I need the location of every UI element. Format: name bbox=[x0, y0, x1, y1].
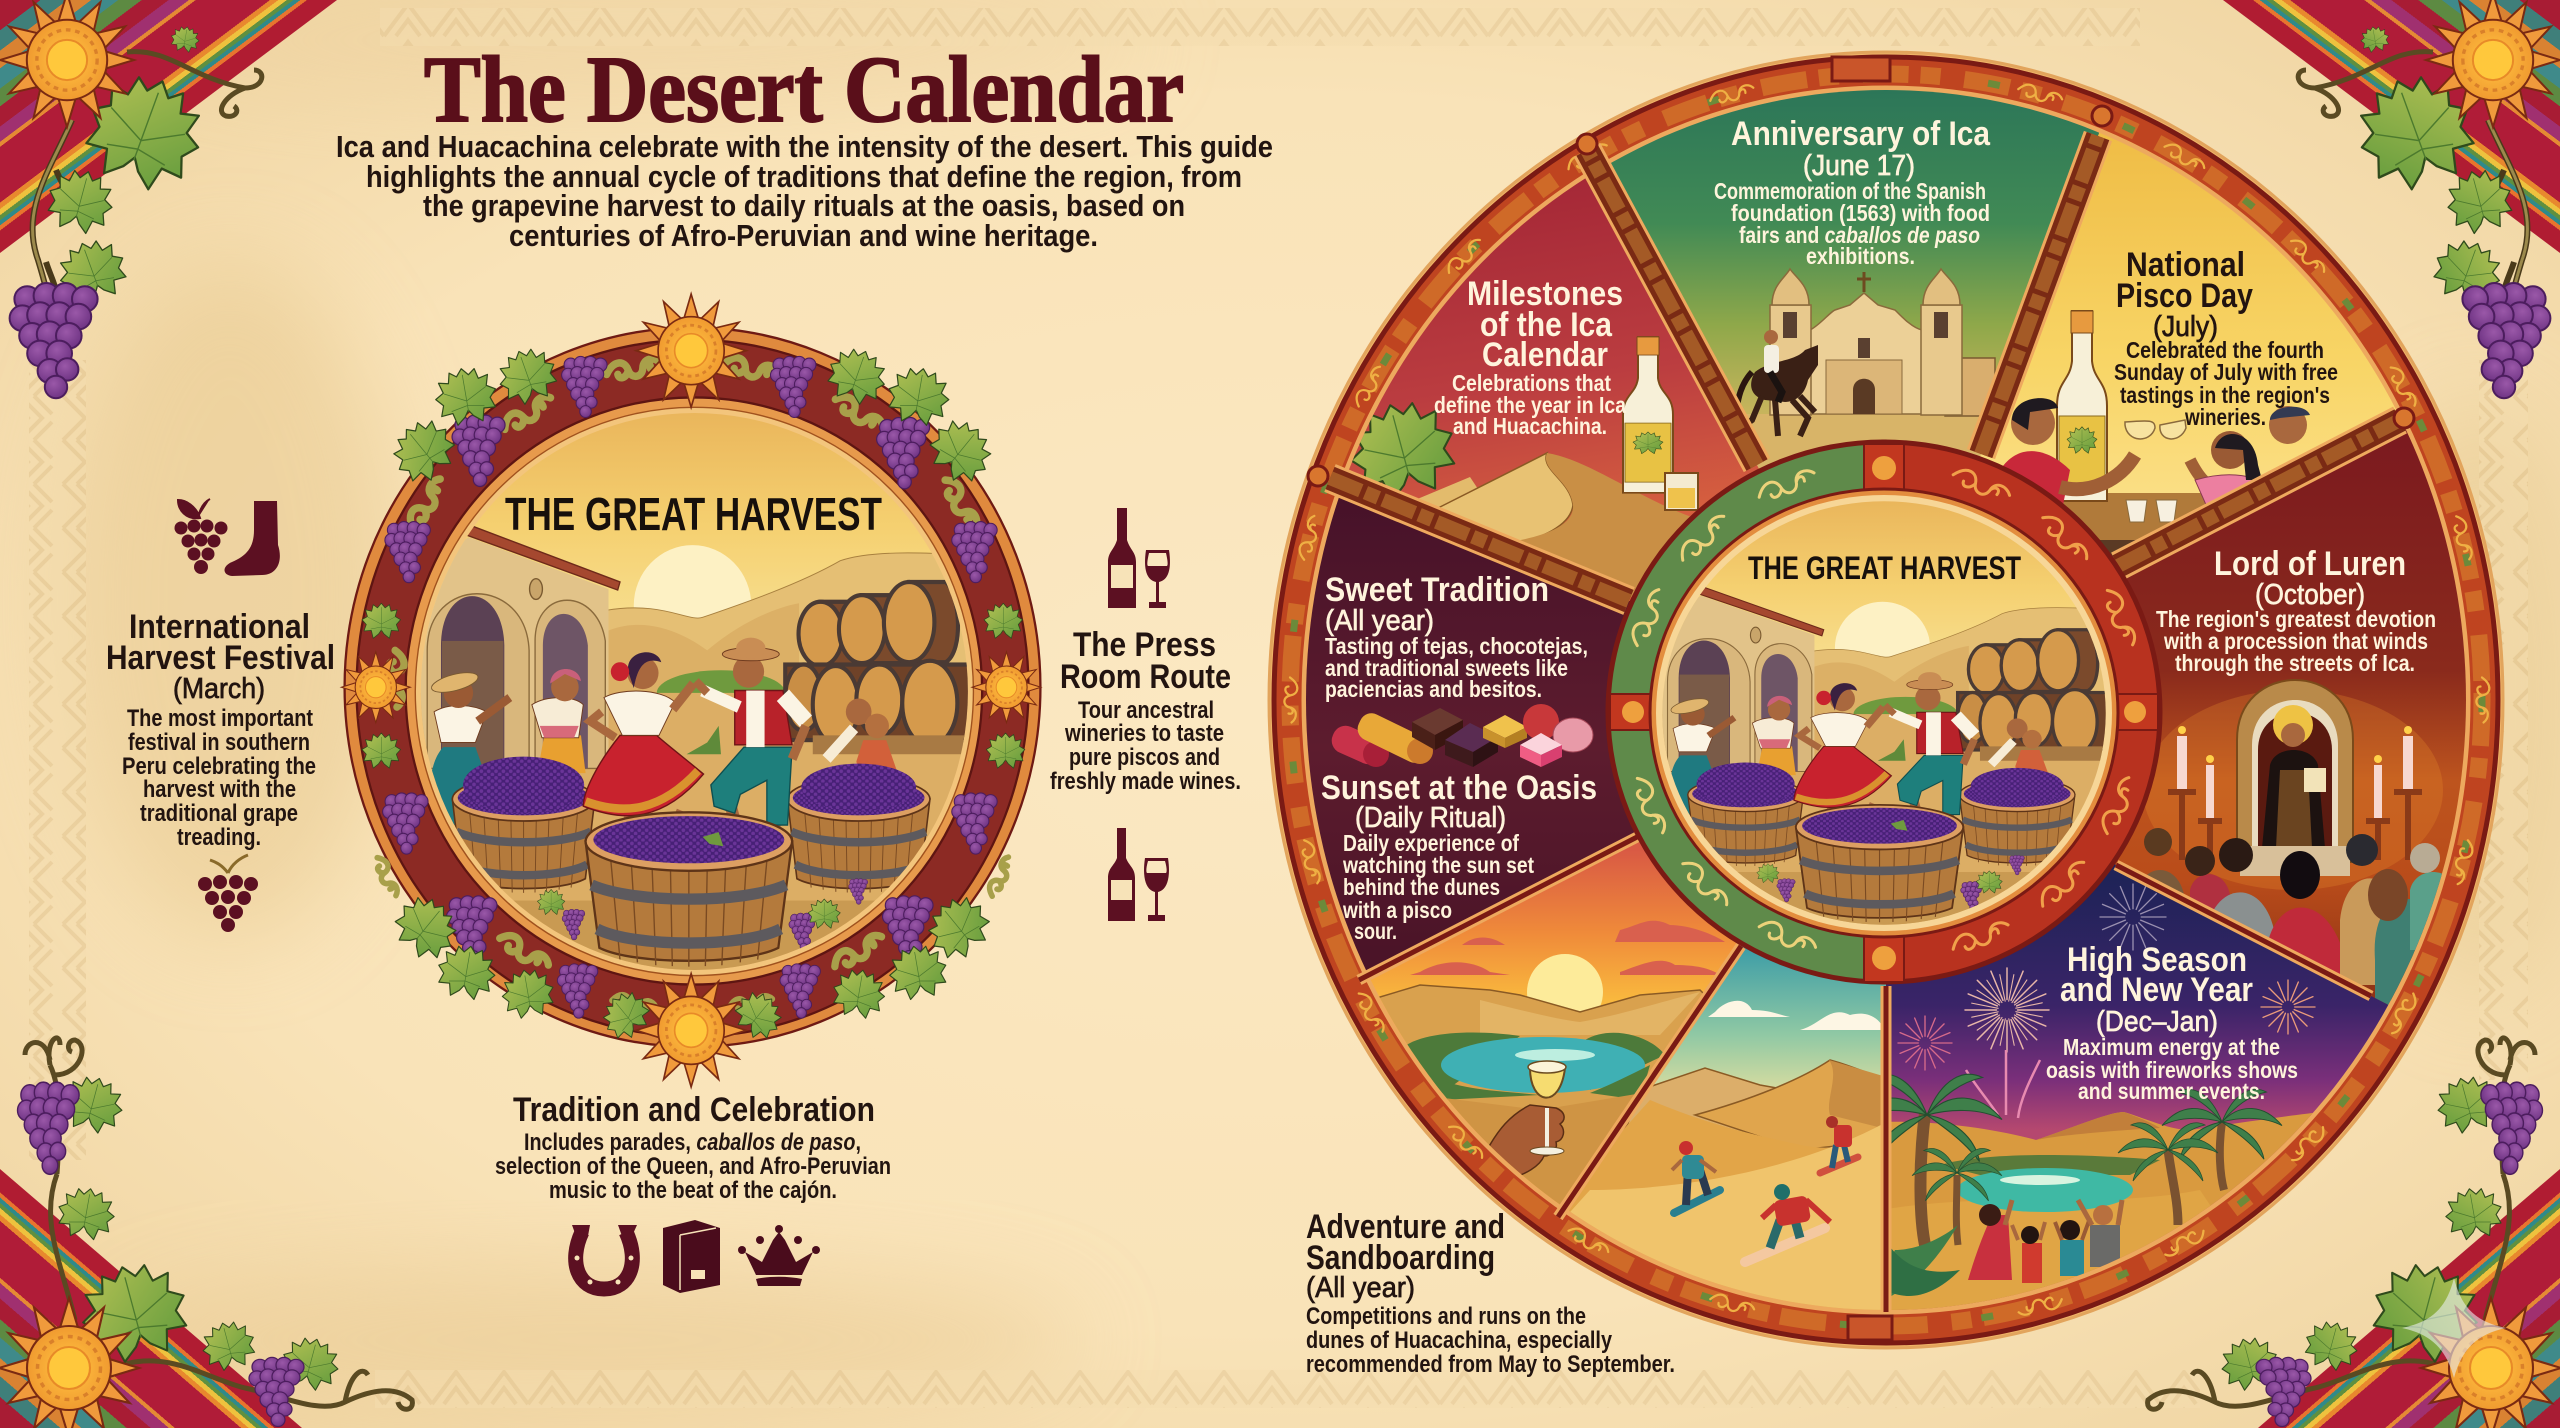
high season text: (Dec–Jan) bbox=[2096, 1006, 2218, 1038]
label: press room route: pure piscos and bbox=[1069, 744, 1220, 771]
intro paragraph: Ica and Huacachina celebrate with the intensity of the desert. This guide bbox=[336, 129, 1273, 164]
milestones text: Calendar bbox=[1482, 336, 1608, 374]
ring leaves and grapes bbox=[362, 341, 1025, 1046]
high season text: High Season bbox=[2067, 941, 2247, 979]
sunset at the oasis text: Daily experience of bbox=[1343, 830, 1519, 856]
icon: grapes and foot bbox=[174, 499, 280, 576]
label: international harvest festival: Peru celebrating the bbox=[122, 753, 316, 780]
anniversary text bbox=[1714, 115, 1991, 269]
wedge: sweet tradition bbox=[1270, 440, 1690, 1000]
panel: calendar wheel bbox=[1269, 50, 2520, 1400]
label: press room route: wineries to taste bbox=[1064, 720, 1224, 747]
label: press room route bbox=[1050, 626, 1241, 795]
corner: bottom-right bbox=[2148, 1038, 2560, 1428]
label: tradition and celebration: music to the beat of the cajón. bbox=[549, 1177, 837, 1204]
sweet tradition text: paciencias and besitos. bbox=[1325, 676, 1542, 702]
medallion heading: THE GREAT HARVEST bbox=[505, 488, 882, 540]
label: international harvest festival: traditional grape bbox=[140, 800, 298, 827]
corner: top-left bbox=[0, 0, 337, 398]
label: press room route: Room Route bbox=[1060, 658, 1231, 696]
sweet tradition text bbox=[1325, 571, 1588, 702]
roundel scene bbox=[1653, 495, 2118, 933]
intro paragraph: centuries of Afro-Peruvian and wine heritage. bbox=[509, 218, 1098, 253]
scene: pisco toast bbox=[2000, 311, 2325, 570]
sunset at the oasis text: watching the sun set bbox=[1342, 852, 1534, 878]
scene: sweets bbox=[1328, 704, 1593, 768]
scene: dune, leaf, bottle bbox=[1340, 337, 1700, 600]
pisco text: tastings in the region's bbox=[2120, 382, 2330, 408]
wheel spokes bbox=[1330, 136, 2400, 1312]
label: press room route: The Press bbox=[1073, 626, 1216, 664]
sweet tradition text: and traditional sweets like bbox=[1325, 655, 1568, 681]
label: press room route: Tour ancestral bbox=[1078, 697, 1214, 724]
sunset at the oasis text: with a pisco bbox=[1342, 897, 1452, 923]
ring rosettes and tiles bbox=[1308, 57, 2414, 1340]
label: adventure and sandboarding: recommended from May to September. bbox=[1306, 1351, 1675, 1378]
anniversary text: exhibitions. bbox=[1806, 243, 1915, 269]
anniversary text: (June 17) bbox=[1803, 150, 1915, 182]
sunset at the oasis text: Sunset at the Oasis bbox=[1321, 769, 1597, 807]
milestones text: and Huacachina. bbox=[1453, 413, 1607, 439]
label: international harvest festival: treading. bbox=[177, 824, 261, 851]
label: tradition and celebration bbox=[495, 1091, 891, 1204]
milestones text: of the Ica bbox=[1480, 306, 1613, 344]
sweet tradition text: Tasting of tejas, chocotejas, bbox=[1325, 633, 1588, 659]
milestones text: Celebrations that bbox=[1452, 370, 1611, 396]
scene: altar, candles, crowd bbox=[2135, 680, 2455, 1010]
high season text: oasis with fireworks shows bbox=[2046, 1057, 2298, 1083]
label: tradition and celebration: selection of the Queen, and Afro-Peruvian bbox=[495, 1153, 891, 1180]
pisco text bbox=[2114, 246, 2338, 430]
pisco text: Sunday of July with free bbox=[2114, 359, 2338, 385]
scene: sunset, oasis, glass bbox=[1370, 921, 1725, 1300]
label: press room route: freshly made wines. bbox=[1050, 768, 1241, 795]
sunset at the oasis text: (Daily Ritual) bbox=[1355, 802, 1506, 834]
center harvest roundel bbox=[1608, 442, 2160, 982]
label: adventure and sandboarding: (All year) bbox=[1306, 1272, 1415, 1304]
wedge: sandboarding scene bbox=[1569, 946, 1886, 1310]
icon: cajon drum bbox=[663, 1220, 720, 1293]
lord of luren text: The region's greatest devotion bbox=[2156, 606, 2436, 632]
lord of luren text: (October) bbox=[2255, 579, 2365, 611]
sunset at the oasis text: sour. bbox=[1354, 918, 1397, 944]
corner: bottom-left bbox=[0, 1038, 412, 1428]
icon: bottle and glass top bbox=[1108, 508, 1170, 608]
wedge: sunset at the oasis bbox=[1340, 830, 1760, 1300]
milestones text: define the year in Ica bbox=[1434, 392, 1627, 418]
sunset at the oasis text: behind the dunes bbox=[1343, 874, 1500, 900]
label: international harvest festival: Harvest Festival bbox=[106, 639, 335, 677]
label: adventure and sandboarding: dunes of Huacachina, especially bbox=[1306, 1327, 1612, 1354]
pisco text: Pisco Day bbox=[2116, 277, 2253, 315]
anniversary text: foundation (1563) with food bbox=[1731, 200, 1990, 226]
label: tradition and celebration: Tradition and Celebration bbox=[513, 1091, 875, 1129]
intro paragraph: the grapevine harvest to daily rituals at the oasis, based on bbox=[423, 188, 1185, 223]
label: adventure and sandboarding bbox=[1306, 1208, 1675, 1378]
lord of luren text bbox=[2156, 545, 2436, 676]
pisco text: wineries. bbox=[2184, 404, 2266, 430]
roundel heading: THE GREAT HARVEST bbox=[1748, 550, 2021, 586]
roundel ring bbox=[1608, 442, 2160, 982]
panel: great harvest medallion bbox=[341, 294, 1041, 1087]
high season text: and New Year bbox=[2060, 971, 2253, 1009]
label: international harvest festival: harvest with the bbox=[143, 776, 296, 803]
label: international harvest festival: The most important bbox=[127, 705, 313, 732]
corner: top-right bbox=[2223, 0, 2560, 398]
wedge: milestones bbox=[1349, 178, 1759, 601]
ring suns bbox=[341, 294, 1041, 1087]
high season text: and summer events. bbox=[2078, 1078, 2265, 1104]
sweet tradition text: Sweet Tradition bbox=[1325, 571, 1549, 609]
intro paragraph bbox=[336, 129, 1273, 253]
icon: crown bbox=[738, 1225, 820, 1286]
watermark star bbox=[2402, 1278, 2506, 1378]
milestones text: Milestones bbox=[1467, 275, 1623, 313]
lord of luren text: Lord of Luren bbox=[2214, 545, 2406, 583]
wedge: high season bbox=[1886, 864, 2388, 1310]
icon: horseshoe bbox=[572, 1225, 637, 1289]
high season text: Maximum energy at the bbox=[2063, 1034, 2280, 1060]
wedge: lord of luren bbox=[2115, 429, 2466, 1005]
ring vines bbox=[372, 356, 1014, 1014]
pisco text: Celebrated the fourth bbox=[2126, 337, 2324, 363]
title: The Desert Calendar bbox=[424, 38, 1184, 142]
label: adventure and sandboarding: Sandboarding bbox=[1306, 1239, 1495, 1277]
scene: church and horse rider bbox=[1736, 268, 1996, 468]
wedge: national pisco day bbox=[1980, 132, 2396, 558]
sunset at the oasis text bbox=[1321, 769, 1597, 944]
label: international harvest festival: International bbox=[129, 608, 310, 646]
medallion ornate ring bbox=[341, 294, 1041, 1087]
anniversary text: Anniversary of Ica bbox=[1731, 115, 1991, 153]
lord of luren text: with a procession that winds bbox=[2163, 628, 2428, 654]
wheel outer ring bbox=[1269, 52, 2503, 1348]
label: tradition and celebration: Includes parades, caballos de paso, bbox=[524, 1129, 861, 1156]
anniversary text: Commemoration of the Spanish bbox=[1714, 178, 1986, 204]
label: international harvest festival: (March) bbox=[173, 673, 265, 705]
label: international harvest festival bbox=[106, 608, 335, 851]
high season text bbox=[2046, 941, 2298, 1104]
anniversary text: fairs and caballos de paso bbox=[1739, 222, 1980, 248]
label: adventure and sandboarding: Competitions and runs on the bbox=[1306, 1303, 1586, 1330]
intro paragraph: highlights the annual cycle of traditions that define the region, from bbox=[366, 159, 1242, 194]
pisco text: National bbox=[2126, 246, 2245, 284]
pisco text: (July) bbox=[2153, 311, 2218, 343]
milestones text bbox=[1434, 275, 1627, 439]
sweet tradition text: (All year) bbox=[1325, 605, 1434, 637]
sandboarders bbox=[1672, 1116, 1858, 1262]
scene: fireworks and oasis bbox=[1892, 883, 2316, 1310]
label: adventure and sandboarding: Adventure and bbox=[1306, 1208, 1505, 1246]
label: international harvest festival: festival in southern bbox=[128, 729, 310, 756]
wedge: anniversary of ica bbox=[1611, 90, 2100, 468]
lord of luren text: through the streets of Ica. bbox=[2175, 650, 2415, 676]
icon: grape bunch bbox=[198, 855, 258, 932]
icon: bottle and glass bottom bbox=[1108, 828, 1169, 921]
